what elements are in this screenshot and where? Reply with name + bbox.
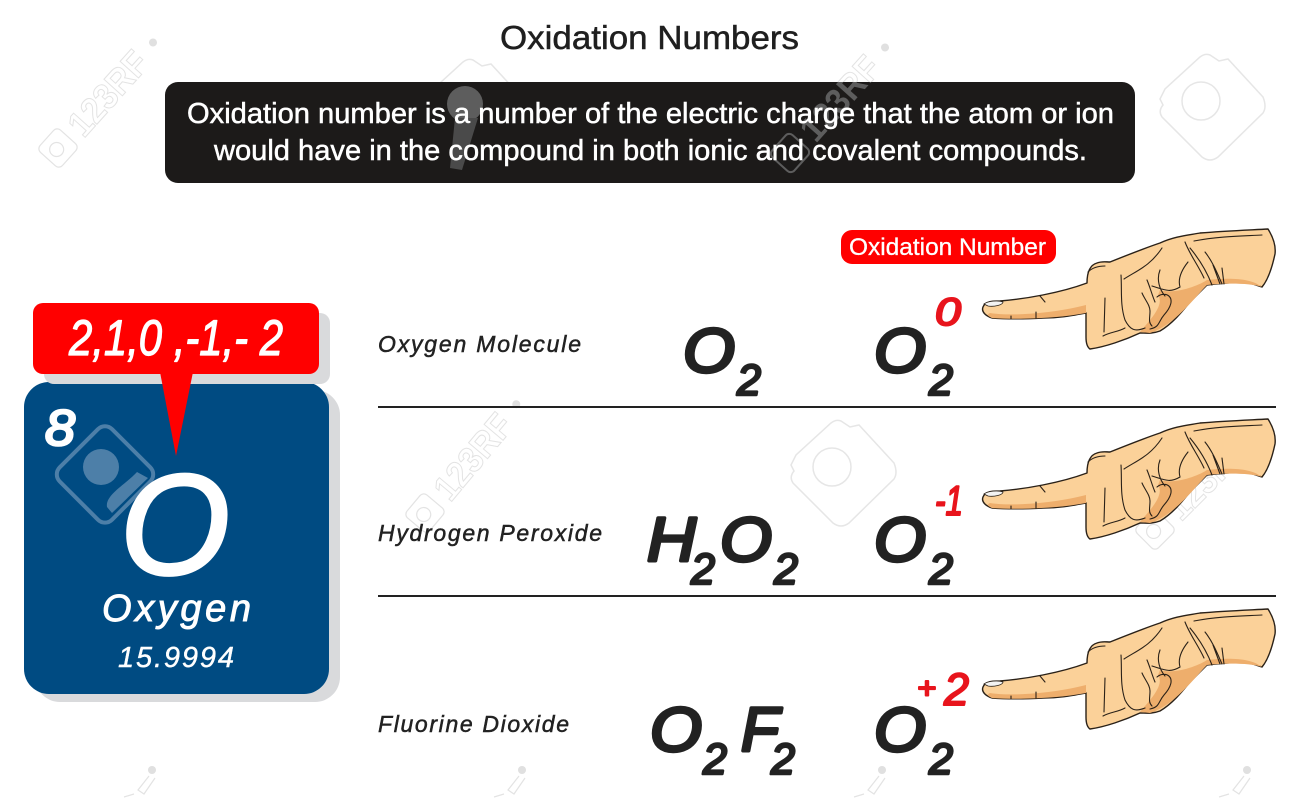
definition panel [165, 82, 1135, 183]
oxidation formula: O [874, 696, 926, 765]
formula: 2 [702, 735, 727, 784]
definition text: would have in the compound in both ionic and covalent compounds. [213, 135, 1087, 167]
element name: Oxygen [102, 588, 251, 630]
formula: 2 [773, 545, 798, 594]
icon: pointing hand [983, 609, 1275, 729]
watermark pattern: 123RF [1158, 428, 1258, 528]
label: Oxygen Molecule [378, 331, 581, 357]
oxidation formula [874, 477, 963, 594]
title: Oxidation Numbers [500, 19, 799, 56]
icon: pointing hand [983, 229, 1275, 349]
row: oxygen molecule [378, 229, 1275, 405]
definition text: Oxidation number is a number of the electric charge that the atom or ion [187, 98, 1114, 130]
watermark pattern: 123RF [59, 42, 157, 144]
formula [647, 506, 798, 594]
formula: O [650, 696, 702, 765]
panel: oxygen element card [24, 382, 340, 702]
oxidation formula: 2 [943, 664, 969, 715]
atomic mass: 15.9994 [118, 642, 234, 674]
icon: pointing hand [983, 419, 1275, 539]
oxidation formula: 2 [928, 356, 953, 405]
oxidation number label: Oxidation Number [849, 234, 1046, 261]
oxidation formula: 0 [935, 291, 961, 334]
oxidation formula [874, 664, 969, 784]
watermark pattern: 123RF [425, 405, 521, 508]
watermark on panel [447, 82, 872, 174]
label: Fluorine Dioxide [378, 711, 569, 737]
formula [683, 317, 761, 405]
formula: O [683, 317, 735, 386]
row: fluorine dioxide [378, 609, 1275, 784]
oxidation formula: 2 [928, 545, 953, 594]
formula [650, 696, 795, 784]
formula: O [720, 506, 772, 575]
oxidation formula: 2 [928, 735, 953, 784]
oxidation formula: O [874, 506, 926, 575]
formula: 2 [736, 356, 761, 405]
divider [378, 595, 1276, 597]
row: hydrogen peroxide [378, 419, 1275, 594]
element symbol: O [120, 446, 230, 605]
oxidation formula [874, 291, 961, 405]
formula: H [647, 506, 696, 575]
watermark on panel: 123RF [791, 47, 889, 149]
icon: card watermark [53, 422, 157, 527]
callout: possible oxidation states [33, 303, 330, 456]
oxidation formula: -1 [935, 477, 963, 524]
label: Hydrogen Peroxide [378, 520, 602, 546]
watermark pattern: 123RF [791, 47, 889, 149]
atomic number: 8 [45, 400, 75, 456]
oxidation formula: O [874, 317, 926, 386]
formula: F [741, 696, 782, 765]
callout: possible oxidation states: 2,1,0 ,-1,- 2 [68, 310, 283, 366]
divider [378, 406, 1276, 408]
formula: 2 [690, 545, 715, 594]
oxidation formula: + [917, 672, 936, 705]
definition text [187, 98, 1114, 167]
formula: 2 [770, 735, 795, 784]
